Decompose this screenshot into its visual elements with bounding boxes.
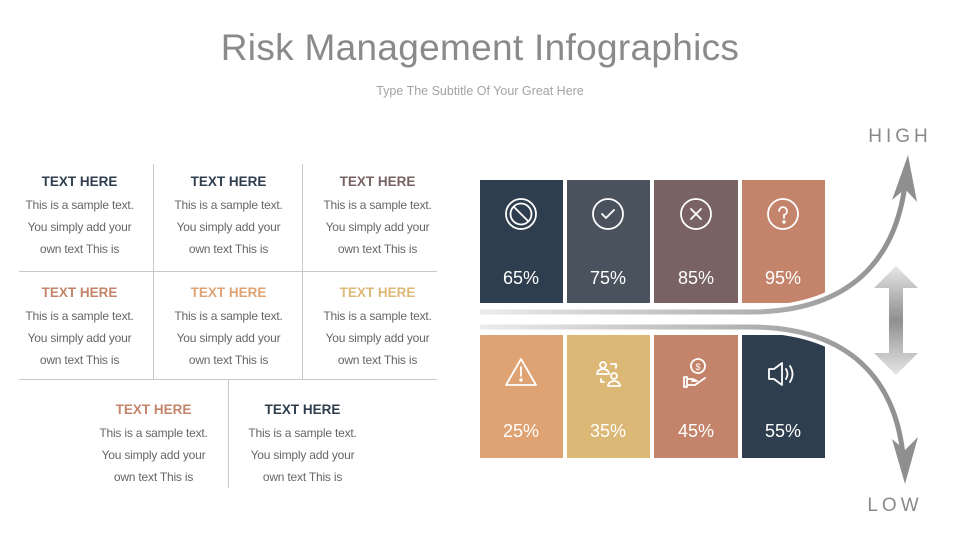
text block 6: TEXT HERE — [340, 285, 415, 300]
text block 6: own text This is — [338, 353, 417, 367]
text block 8: TEXT HERE — [265, 402, 340, 417]
text block 2: You simply add your — [177, 220, 280, 234]
double arrow — [874, 266, 918, 375]
percentages: 75% — [590, 268, 626, 288]
text block 6: You simply add your — [326, 331, 429, 345]
label high: HIGH — [868, 126, 932, 147]
text block 5 — [174, 285, 283, 367]
text block 5: own text This is — [189, 353, 268, 367]
text block 4: own text This is — [40, 353, 119, 367]
text block 5: This is a sample text. — [174, 309, 283, 323]
percentages: 45% — [678, 421, 714, 441]
text block 3: This is a sample text. — [323, 198, 432, 212]
text block 6 — [323, 285, 432, 367]
text block 1: own text This is — [40, 242, 119, 256]
text block 2 — [174, 174, 283, 256]
text block 3: TEXT HERE — [340, 174, 415, 189]
text block 4: TEXT HERE — [42, 285, 117, 300]
text block 1: You simply add your — [28, 220, 131, 234]
text block 7: You simply add your — [102, 448, 205, 462]
curved arrow low — [480, 327, 918, 484]
text block 2: TEXT HERE — [191, 174, 266, 189]
text block 5: TEXT HERE — [191, 285, 266, 300]
percentages: 35% — [590, 421, 626, 441]
percentages — [503, 268, 801, 441]
text block 4 — [25, 285, 134, 367]
text block 8: own text This is — [263, 470, 342, 484]
text block 2: own text This is — [189, 242, 268, 256]
subtitle: Type The Subtitle Of Your Great Here — [376, 84, 584, 98]
label low: LOW — [867, 495, 923, 516]
text block 1: This is a sample text. — [25, 198, 134, 212]
percentages: 95% — [765, 268, 801, 288]
text block 8: This is a sample text. — [248, 426, 357, 440]
percentages: 85% — [678, 268, 714, 288]
percentages: 25% — [503, 421, 539, 441]
percentages: 65% — [503, 268, 539, 288]
text block 8 — [248, 402, 357, 484]
text block 3 — [323, 174, 432, 256]
boxes top row — [480, 180, 825, 303]
text block 8: You simply add your — [251, 448, 354, 462]
curved arrow high — [480, 155, 917, 312]
text block 7: TEXT HERE — [116, 402, 191, 417]
text block 6: This is a sample text. — [323, 309, 432, 323]
title: Risk Management Infographics — [221, 27, 739, 68]
text block 3: own text This is — [338, 242, 417, 256]
text block 3: You simply add your — [326, 220, 429, 234]
icons — [506, 199, 798, 387]
text block 5: You simply add your — [177, 331, 280, 345]
text block 1 — [25, 174, 134, 256]
text block 7: own text This is — [114, 470, 193, 484]
text block 4: You simply add your — [28, 331, 131, 345]
text block 2: This is a sample text. — [174, 198, 283, 212]
text block 1: TEXT HERE — [42, 174, 117, 189]
text block 7 — [99, 402, 208, 484]
text block 4: This is a sample text. — [25, 309, 134, 323]
boxes bottom row — [480, 335, 825, 458]
percentages: 55% — [765, 421, 801, 441]
text block 7: This is a sample text. — [99, 426, 208, 440]
icons: $ — [695, 362, 701, 372]
